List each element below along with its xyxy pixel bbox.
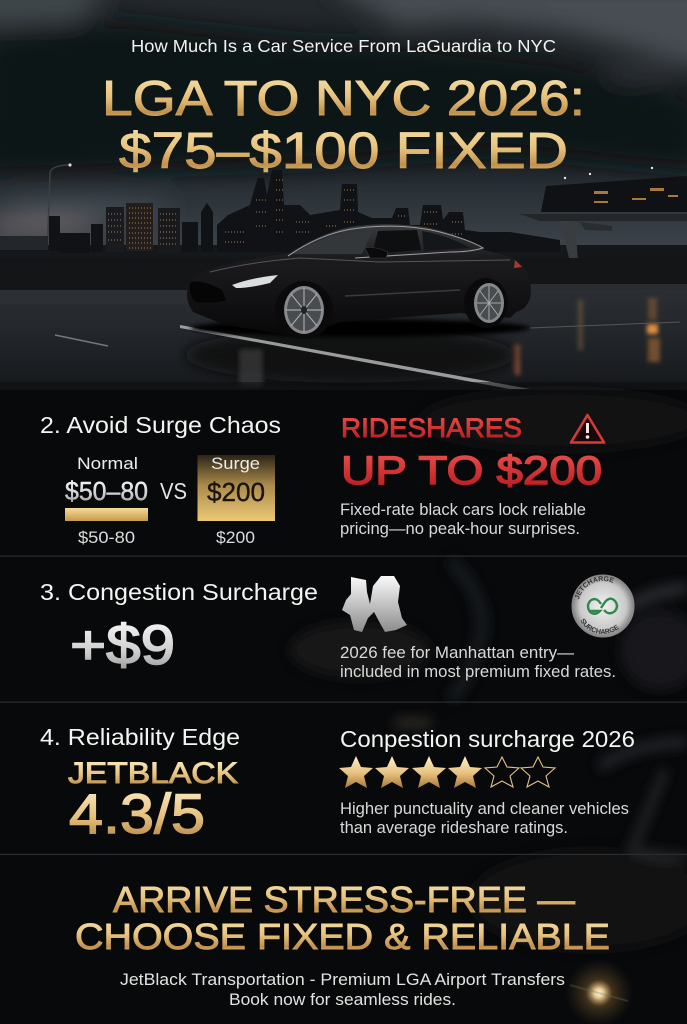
bar captions bbox=[78, 528, 255, 547]
front wheel bbox=[275, 281, 333, 339]
description bbox=[340, 643, 616, 681]
description: Higher punctuality and cleaner vehicles bbox=[340, 799, 629, 818]
rear wheel bbox=[464, 278, 508, 328]
elevated terminal structure bbox=[520, 167, 687, 282]
panel: avoid surge chaos bbox=[40, 412, 604, 547]
bar captions: $200 bbox=[216, 528, 255, 547]
call to action heading: ARRIVE STRESS-FREE — bbox=[113, 879, 575, 920]
call to action heading: CHOOSE FIXED & RELIABLE bbox=[75, 916, 610, 957]
black sedan bbox=[187, 224, 531, 339]
surcharge amount: +$9 bbox=[70, 613, 175, 676]
street lamp bbox=[47, 163, 72, 262]
road lines bbox=[55, 322, 680, 389]
road reflections bbox=[185, 298, 660, 386]
main title: $75–$100 FIXED bbox=[119, 122, 568, 179]
call to action heading bbox=[75, 879, 610, 957]
comparison labels: Normal bbox=[77, 454, 138, 473]
footer text: JetBlack Transportation - Premium LGA Airport Transfers bbox=[120, 970, 565, 989]
description: Fixed-rate black cars lock reliable bbox=[340, 500, 586, 519]
brand name: JETBLACK bbox=[68, 757, 238, 790]
icon: lens flare bbox=[565, 959, 633, 1024]
blurred car interior bbox=[290, 390, 687, 950]
storm clouds bbox=[0, 0, 687, 231]
rating label: Conpestion surcharge 2026 bbox=[340, 726, 635, 752]
bar captions: $50-80 bbox=[78, 528, 135, 547]
icon: surcharge badge: SURCHARGE bbox=[580, 618, 620, 634]
panel: call to action bbox=[75, 879, 633, 1024]
normal price: $50–80 bbox=[65, 476, 148, 506]
rating score: 4.3/5 bbox=[69, 782, 205, 845]
rideshare price: UP TO $200 bbox=[341, 449, 602, 493]
description: 2026 fee for Manhattan entry— bbox=[340, 643, 574, 662]
description bbox=[340, 500, 586, 538]
section dividers bbox=[0, 556, 687, 855]
description: included in most premium fixed rates. bbox=[340, 662, 616, 681]
footer text bbox=[120, 970, 565, 1009]
hero photo: night skyline and black car bbox=[0, 0, 687, 390]
icon: surcharge badge: JETCHARGE bbox=[574, 576, 614, 600]
skyline bbox=[0, 170, 687, 270]
skyline window lights bbox=[108, 180, 462, 248]
description: pricing—no peak-hour surprises. bbox=[340, 519, 580, 538]
versus: VS bbox=[160, 478, 187, 504]
surge price box bbox=[198, 455, 275, 521]
icon: surcharge badge bbox=[572, 574, 634, 638]
description: than average rideshare ratings. bbox=[340, 818, 568, 837]
surge price: $200 bbox=[207, 477, 265, 507]
heading: 2. Avoid Surge Chaos bbox=[40, 412, 281, 438]
footer text: Book now for seamless rides. bbox=[229, 990, 456, 1009]
description bbox=[340, 799, 629, 837]
dark lower background bbox=[0, 390, 687, 1024]
hero fade into lower sections bbox=[0, 382, 687, 390]
heading: 4. Reliability Edge bbox=[40, 724, 240, 750]
heading: 3. Congestion Surcharge bbox=[40, 579, 318, 605]
rideshares label: RIDESHARES bbox=[341, 413, 522, 443]
wet ground bbox=[0, 290, 687, 390]
comparison labels bbox=[77, 454, 260, 473]
icon: Manhattan map bbox=[342, 576, 407, 632]
icon: warning triangle bbox=[571, 415, 604, 442]
main title bbox=[102, 72, 585, 179]
star rating bbox=[339, 756, 555, 788]
comparison labels: Surge bbox=[211, 454, 260, 473]
main title: LGA TO NYC 2026: bbox=[102, 72, 585, 126]
panel: congestion surcharge bbox=[40, 574, 634, 681]
panel: reliability edge bbox=[40, 724, 635, 845]
normal price bar bbox=[65, 508, 148, 521]
subtitle: How Much Is a Car Service From LaGuardia to NYC bbox=[131, 36, 556, 56]
